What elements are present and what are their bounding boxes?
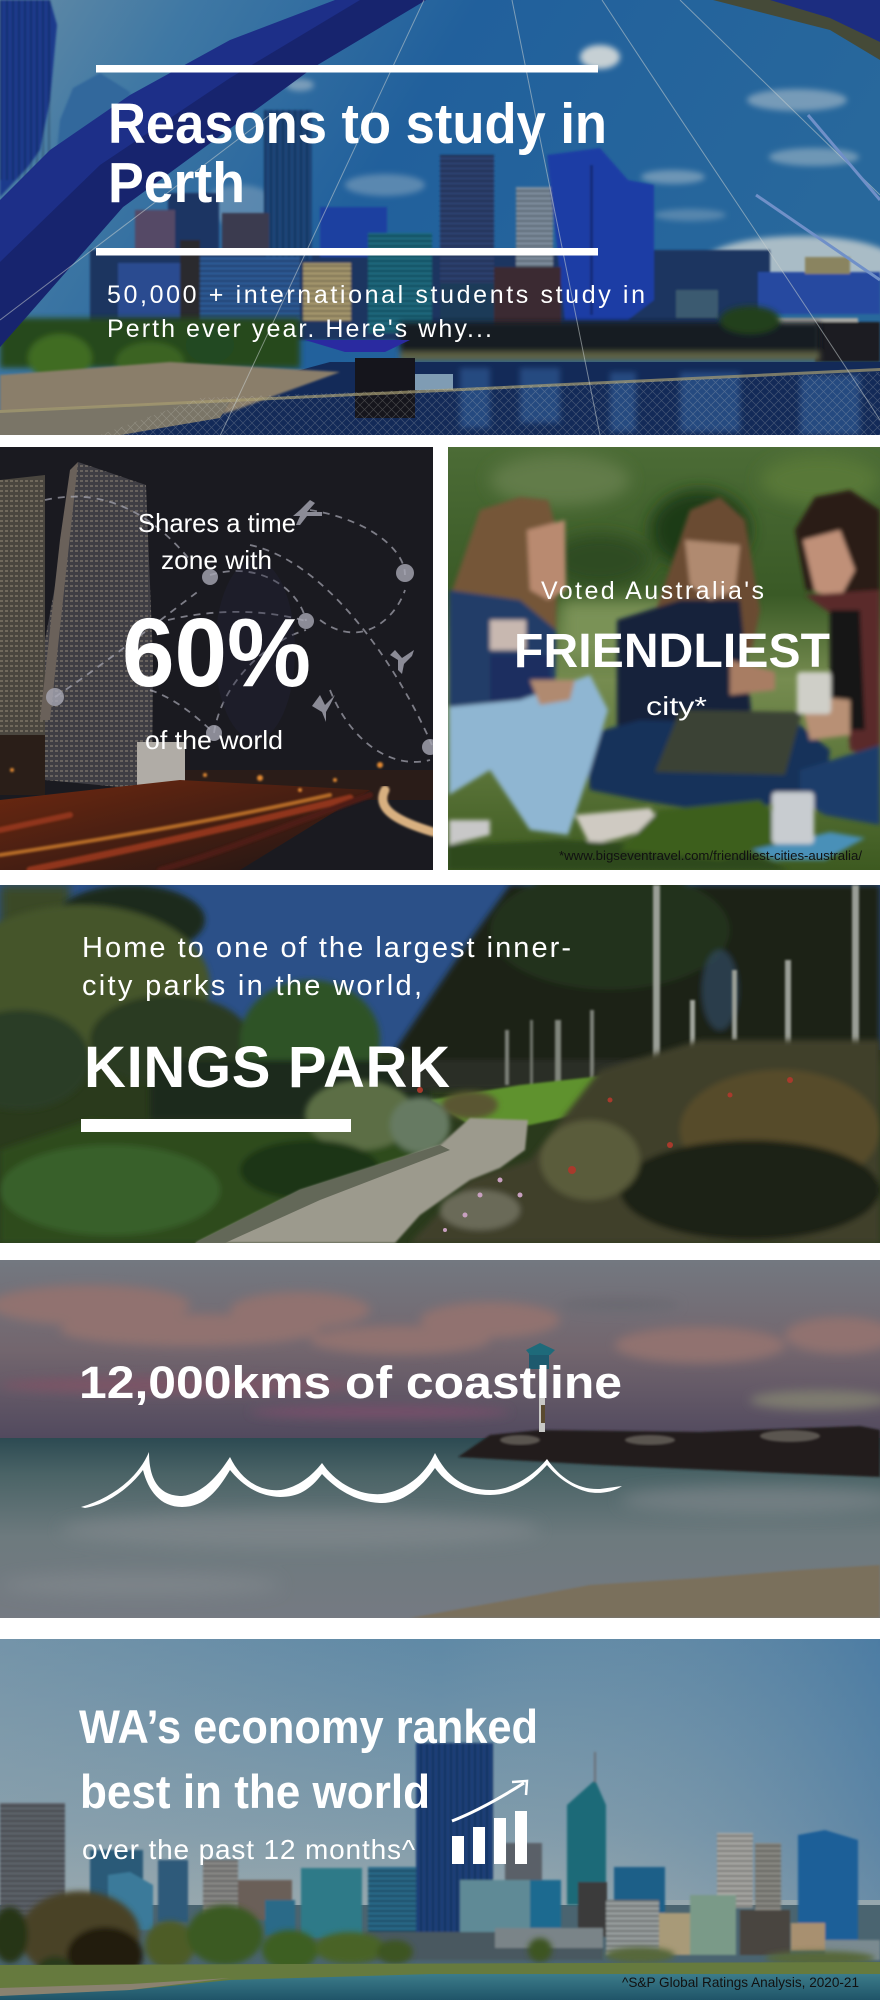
bottom rule [96, 248, 598, 256]
heading: economy ranked: WA’s economy ranked [79, 1700, 538, 1753]
panel: friendliest city [448, 447, 880, 870]
stat: 60%: 60% [122, 598, 311, 707]
hero photo: Perth skyline through bridge arch [0, 0, 880, 435]
text: shares a time zone with: zone with [161, 545, 272, 575]
panel: kings park [0, 870, 880, 1243]
waterfront [60, 362, 880, 435]
photo: Perth skyline by the river [0, 1639, 880, 2000]
trees [0, 306, 820, 382]
text: shares a time zone with: Shares a time [138, 508, 296, 538]
title: Reasons to study in [108, 92, 607, 156]
text: shares a time zone with [138, 508, 296, 575]
source note: ^S&P Global Ratings Analysis, 2020-21 [622, 1974, 859, 1990]
panel: coastline [0, 1260, 880, 1618]
text: over the past 12 months: over the past 12 months^ [82, 1834, 415, 1865]
photo: park path and trees [0, 870, 880, 1243]
heading: kings park: KINGS PARK [84, 1035, 450, 1100]
source note: *www.bigseventravel.com/friendliest-cities-australia/ [559, 848, 862, 863]
subtitle: 50,000 + international students study in [107, 281, 645, 309]
subtitle: Perth ever year. Here's why... [107, 315, 492, 343]
icon: wave [81, 1452, 622, 1508]
photo: three students on grass [448, 447, 880, 870]
panel: economy [0, 1639, 880, 2000]
title [108, 92, 607, 215]
panel: hero [0, 0, 880, 435]
title: Perth [108, 151, 245, 215]
panel: time zone [0, 447, 438, 870]
photo: city tower at night with flight map [0, 447, 438, 870]
text: home to one of the largest [82, 932, 571, 1002]
lighthouse [526, 1343, 555, 1432]
photo: beach at dusk with jetty [0, 1260, 880, 1618]
icon: rising bar chart [452, 1781, 527, 1864]
text: city*: city* [646, 691, 707, 721]
bridge arch [0, 0, 426, 347]
text: home to one of the largest: city parks in the world, [82, 970, 422, 1002]
text: voted australia's: Voted Australia's [541, 577, 764, 605]
top rule [96, 65, 598, 72]
text: of the world: of the world [145, 725, 283, 755]
heading: economy ranked [79, 1700, 538, 1818]
heading: economy ranked: best in the world [80, 1765, 430, 1818]
heading: coastline: 12,000kms of coastline [79, 1357, 622, 1408]
subtitle [107, 281, 645, 343]
heading: friendliest: FRIENDLIEST [514, 625, 830, 678]
underline bar [81, 1119, 351, 1132]
text: home to one of the largest: Home to one of the largest inner- [82, 932, 571, 964]
